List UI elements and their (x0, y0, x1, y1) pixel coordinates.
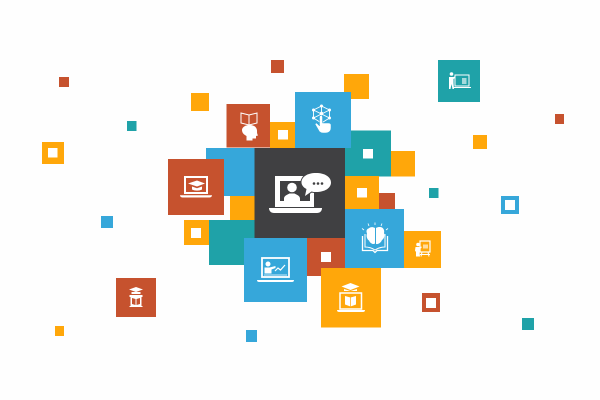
icon: presenter and laptop (449, 72, 471, 89)
icon: laptop with person and speech bubble (269, 173, 331, 213)
panel: touch network (295, 92, 351, 148)
panel: book and head (226, 104, 270, 148)
icon: brain over open book (362, 222, 388, 252)
panel: school and cap (116, 278, 156, 317)
icon: teacher beside board (415, 241, 430, 256)
panel: teacher with board (404, 231, 441, 268)
icon: laptop with open book and graduation cap (337, 283, 365, 312)
panel: presentation chart laptop (244, 238, 307, 302)
panel: graduation laptop (168, 159, 224, 215)
icon: teacher on laptop with line chart (257, 258, 294, 282)
icon: hand touching network (312, 104, 331, 133)
panel: brain and book (345, 209, 404, 268)
scattered squares (42, 60, 564, 342)
icon: graduation cap over book stand (129, 287, 143, 307)
panel: teacher with laptop (438, 60, 480, 102)
icon: open book above head (241, 113, 258, 140)
icon: laptop with graduation cap (180, 176, 212, 198)
panel: central online learning (254, 148, 345, 238)
panel: laptop with book and cap (321, 268, 381, 328)
central cluster background squares (184, 122, 415, 276)
